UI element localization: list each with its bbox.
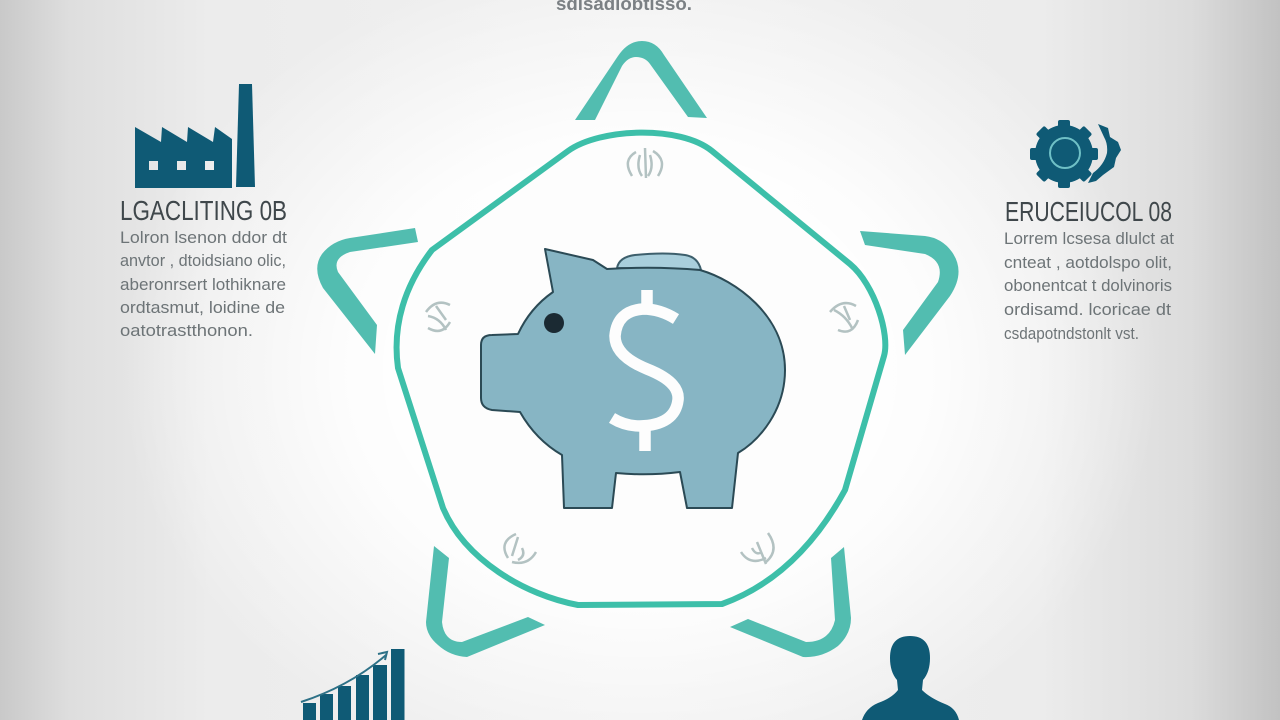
left body text: anvtor , dtoidsiano olic,	[120, 251, 286, 270]
left body text: aberonrsert lothiknare	[120, 275, 286, 294]
chimney	[236, 84, 255, 187]
arrow: left	[317, 228, 418, 354]
right body text: obonentcat t dolvinoris	[1004, 276, 1172, 295]
small ornament: left	[426, 303, 450, 331]
pig body	[481, 249, 785, 508]
bar chart icon	[301, 649, 404, 720]
left body text	[120, 228, 287, 340]
left body text: Lolron lsenon ddor dt	[120, 228, 287, 247]
small ornament: bottom left	[504, 534, 536, 563]
arrow: bottom left	[426, 546, 545, 657]
right heading: ERUCEIUCOL 08	[1005, 196, 1172, 227]
gear icon	[1030, 120, 1121, 188]
factory icon	[135, 84, 255, 188]
factory building	[135, 127, 232, 188]
small ornament: right	[830, 303, 858, 332]
right body text: Lorrem lcsesa dlulct at	[1004, 229, 1174, 248]
bars	[303, 649, 404, 720]
small ornament: bottom right	[741, 533, 774, 564]
right body text	[1004, 229, 1174, 343]
right body text: csdapotndstonlt vst.	[1004, 324, 1139, 343]
main gear	[1030, 120, 1098, 188]
trend arrow	[301, 652, 387, 702]
coin slot	[617, 254, 701, 270]
arrow: right	[860, 231, 959, 355]
pentagon ring	[397, 133, 885, 605]
arrow: bottom right	[730, 547, 851, 657]
left text block	[120, 195, 287, 340]
piggy bank icon	[481, 249, 785, 508]
partial gear arc	[1088, 124, 1121, 183]
right body text: cnteat , aotdolspo olit,	[1004, 253, 1172, 272]
left heading: LGACLITING 0B	[120, 195, 287, 226]
arrow: top	[575, 41, 707, 120]
person icon	[862, 636, 959, 720]
pig eye	[544, 313, 564, 333]
right text block	[1004, 196, 1174, 343]
dollar sign	[612, 290, 678, 451]
left body text: oatotrastthonon.	[120, 321, 253, 340]
right body text: ordisamd. lcoricae dt	[1004, 300, 1171, 319]
left body text: ordtasmut, loidine de	[120, 298, 285, 317]
small ornament: top	[628, 148, 662, 178]
